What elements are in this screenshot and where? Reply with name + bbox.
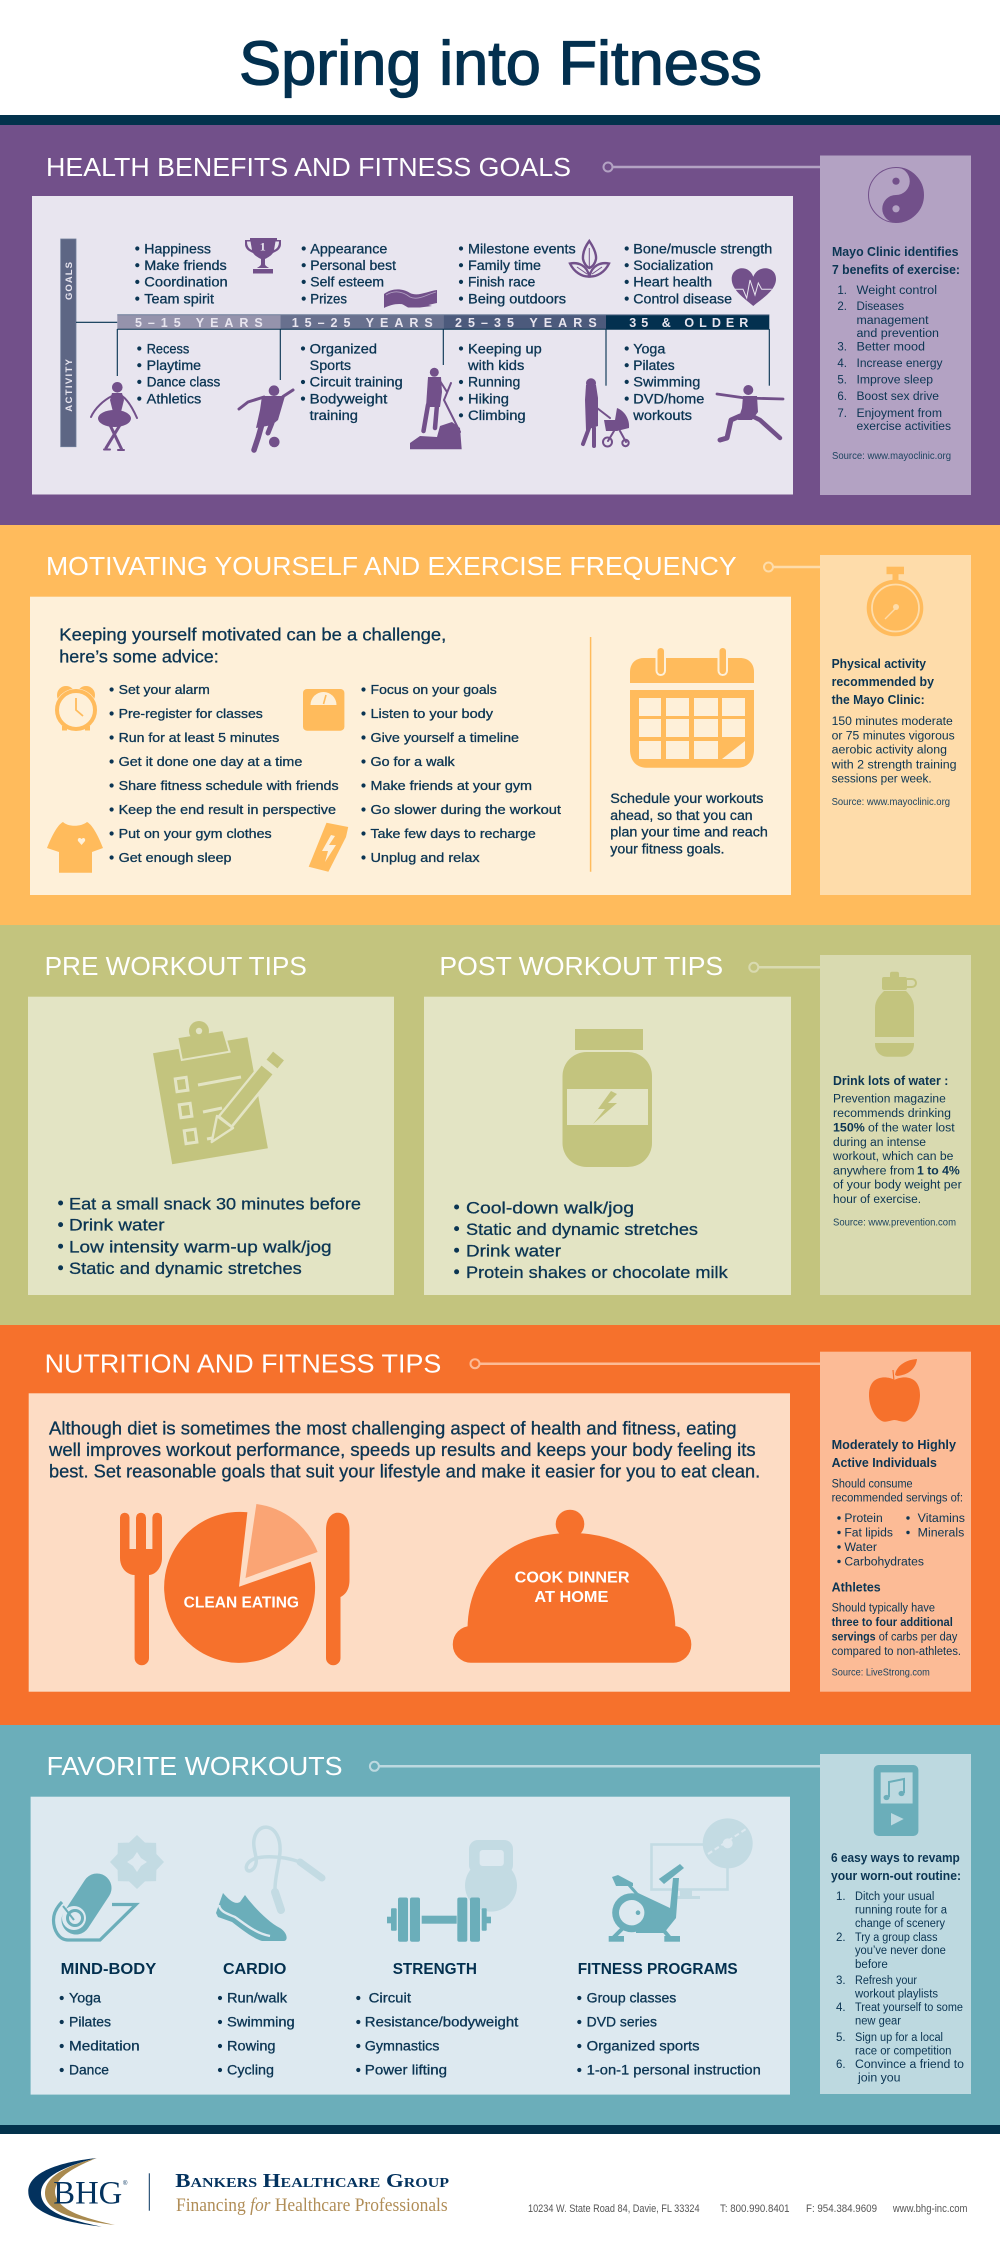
sidebar: nutrition for active individuals	[820, 1352, 971, 1692]
connector: favorite workouts	[370, 1762, 820, 1771]
column: strength: Resistance/bodyweight	[365, 2014, 519, 2030]
icon: water bottle	[875, 972, 916, 1057]
icon: trophy	[245, 238, 281, 274]
timeline age bands: 35 & OLDER	[629, 316, 748, 330]
benefits list: exercise activities	[856, 421, 951, 433]
schedule note: ahead, so that you can	[610, 808, 753, 823]
nutrition paragraph: best. Set reasonable goals that suit your lifestyle and make it easier for you to eat clean.	[49, 1461, 760, 1482]
advice list: right column: Go slower during the workout	[370, 802, 561, 817]
activity list: 5-15 years: Playtime	[147, 358, 201, 373]
goals list: 35 and older: Heart health	[633, 275, 712, 290]
column: fitness programs: DVD series	[587, 2014, 657, 2030]
icon: running shoe	[216, 1893, 287, 1941]
benefits list: 4.	[837, 358, 847, 370]
routine list: 5.	[836, 2032, 846, 2044]
benefits list: Weight control	[856, 285, 937, 297]
heading: post workout tips: POST WORKOUT TIPS	[439, 951, 723, 981]
schedule note: your fitness goals.	[610, 842, 724, 857]
clean eating plate chart	[164, 1504, 318, 1663]
activity list: 35 and older: DVD/home	[633, 391, 704, 406]
sidebar heading	[832, 1437, 957, 1470]
icon: trophy: 1	[260, 240, 266, 254]
activity list: 15-25 years	[301, 341, 403, 423]
contact details: 10234 W. State Road 84, Davie, FL 33324	[528, 2203, 700, 2215]
logo: BHG: BHG	[53, 2175, 122, 2211]
athletes text: three to four additional	[832, 1617, 953, 1629]
source: Source: LiveStrong.com	[832, 1668, 930, 1679]
side bar: goals and activity: GOALS	[64, 262, 75, 300]
column: mind-body: Pilates	[69, 2014, 111, 2030]
advice list: right column: Take few days to recharge	[370, 826, 536, 841]
advice list: left column: Set your alarm	[119, 682, 210, 697]
icon: stopwatch	[867, 567, 923, 636]
intro text: Keeping yourself motivated can be a challenge,	[59, 625, 446, 645]
goals list: 15-25 years: Prizes	[310, 291, 347, 306]
heading: motivating yourself: MOTIVATING YOURSELF AND EXERCISE FREQUENCY	[46, 551, 737, 581]
pre workout list	[61, 1194, 361, 1278]
sidebar body	[831, 716, 957, 785]
cloche: cook dinner at home	[453, 1510, 691, 1663]
advice list: right column: Go for a walk	[370, 754, 455, 769]
activity list: 35 and older: Swimming	[633, 375, 700, 390]
advice list: left column: Run for at least 5 minutes	[119, 730, 280, 745]
column: fitness programs	[578, 1961, 761, 2078]
sidebar body: anywhere from	[833, 1165, 914, 1177]
panel: post workout	[424, 997, 791, 1295]
sidebar: drink water	[820, 955, 971, 1295]
icon: lotus flower	[110, 1835, 164, 1889]
sidebar heading: 7 benefits of exercise:	[832, 262, 960, 277]
athletes text: Should typically have	[832, 1603, 935, 1615]
icon: exercise bike	[609, 1864, 684, 1942]
timeline age bands: 15–25 YEARS	[292, 316, 433, 330]
post workout list: Drink water	[466, 1242, 561, 1261]
servings text: recommended servings of:	[832, 1493, 963, 1505]
goals list: 25-35 years: Family time	[468, 258, 541, 273]
routine list: 6.	[836, 2059, 846, 2071]
activity list: 25-35 years: Running	[468, 375, 520, 390]
nutrition paragraph: Although diet is sometimes the most challenging aspect of health and fitness, eating	[49, 1417, 737, 1438]
benefits list: 7.	[837, 408, 847, 420]
routine list: Ditch your usual	[855, 1891, 934, 1903]
benefits list: 1.	[837, 285, 847, 297]
sidebar body: recommends drinking	[833, 1108, 951, 1120]
sidebar heading: Moderately to Highly	[832, 1437, 957, 1452]
advice list: left column: Get it done one day at a time	[119, 754, 302, 769]
routine list: 1.	[836, 1891, 846, 1903]
column: cardio: CARDIO	[223, 1961, 286, 1978]
sidebar body: of the water lost	[868, 1122, 956, 1134]
icon: energy bar	[309, 823, 348, 872]
sidebar heading: your worn-out routine:	[831, 1868, 961, 1883]
source: Source: www.mayoclinic.org	[832, 451, 951, 462]
icon: heart with pulse	[732, 268, 776, 306]
servings list: Protein	[844, 1513, 883, 1525]
schedule note: Schedule your workouts	[610, 791, 764, 806]
logo: BHG	[28, 2158, 128, 2227]
connector: nutrition	[470, 1359, 820, 1368]
routine list: change of scenery	[855, 1918, 945, 1930]
routine list: Refresh your	[855, 1975, 917, 1987]
icon: plant	[570, 241, 609, 277]
activity list: 25-35 years: Hiking	[468, 391, 509, 406]
section: health benefits and fitness goals	[0, 125, 1000, 525]
column: cardio: Run/walk	[227, 1990, 287, 2006]
servings text: Should consume	[832, 1478, 913, 1490]
sidebar heading: Physical activity	[832, 656, 927, 671]
section: nutrition and fitness tips	[0, 1325, 1000, 1725]
sidebar body: 1 to 4%	[917, 1165, 960, 1177]
sidebar heading: Drink lots of water :	[833, 1073, 948, 1088]
intro text: here’s some advice:	[59, 646, 219, 666]
figure: woman with stroller	[583, 378, 629, 446]
servings text	[832, 1478, 963, 1505]
sidebar body: aerobic activity along	[832, 745, 947, 757]
sidebar body: 150%	[833, 1122, 865, 1134]
contact details: www.bhg-inc.com	[892, 2203, 968, 2215]
section: motivating yourself and exercise frequency	[0, 525, 1000, 925]
sidebar body: hour of exercise.	[833, 1194, 921, 1206]
sidebar heading	[832, 244, 960, 277]
activity list: 15-25 years: Sports	[310, 358, 351, 373]
side bar: goals and activity: ACTIVITY	[64, 358, 75, 412]
activity list: 25-35 years	[459, 341, 542, 423]
benefits list: management	[856, 315, 929, 327]
column: strength: Circuit	[369, 1990, 411, 2006]
routine list: 4.	[836, 2002, 846, 2014]
servings list: Water	[844, 1542, 877, 1554]
benefits list: Better mood	[856, 342, 925, 354]
benefits list: and prevention	[856, 328, 939, 340]
sidebar heading: the Mayo Clinic:	[832, 692, 925, 707]
source: Source: www.mayoclinic.org	[832, 797, 950, 808]
column: cardio: Rowing	[227, 2038, 276, 2054]
goals list: 25-35 years: Milestone events	[468, 241, 576, 256]
cloche: cook dinner at home: AT HOME	[534, 1589, 608, 1606]
activity list: 5-15 years: Athletics	[147, 391, 202, 406]
sidebar body: 150 minutes moderate	[832, 716, 953, 728]
goals list: 15-25 years: Appearance	[310, 241, 387, 256]
advice list: right column: Unplug and relax	[370, 850, 480, 865]
benefits list: Diseases	[856, 301, 904, 313]
section: workout tips	[0, 925, 1000, 1325]
benefits list: 6.	[837, 391, 847, 403]
advice list: right column	[364, 682, 561, 865]
timeline age bands: 25–35 YEARS	[455, 316, 597, 330]
sidebar body: during an intense	[833, 1137, 926, 1149]
activity list: 5-15 years: Recess	[147, 341, 190, 356]
tagline: Financing for Healthcare Professionals	[176, 2195, 448, 2216]
benefits list: Enjoyment from	[856, 408, 942, 420]
goals list: 15-25 years	[304, 241, 396, 306]
routine list: Convince a friend to	[855, 2059, 964, 2071]
servings list	[839, 1513, 965, 1568]
column: fitness programs: Group classes	[587, 1990, 677, 2006]
company name: Bankers Healthcare Group	[175, 2170, 450, 2192]
routine list: workout playlists	[854, 1988, 938, 2000]
goals list: 5-15 years	[137, 241, 228, 306]
contact details: F: 954.384.9609	[806, 2203, 877, 2215]
servings list: Minerals	[918, 1527, 965, 1539]
athletes text: of carbs per day	[879, 1632, 958, 1644]
routine list: before	[855, 1959, 888, 1971]
post workout list: Protein shakes or chocolate milk	[466, 1263, 728, 1282]
timeline age bands: 5–15 YEARS	[135, 316, 263, 330]
benefits list: Increase energy	[856, 358, 943, 370]
benefits list: 3.	[837, 342, 847, 354]
icon: knife	[326, 1513, 350, 1665]
goals list: 35 and older: Control disease	[633, 291, 732, 306]
sidebar heading	[832, 656, 935, 707]
routine list: join you	[857, 2073, 900, 2085]
column: fitness programs: 1-on-1 personal instruction	[587, 2062, 761, 2078]
pre workout list: Eat a small snack 30 minutes before	[69, 1194, 361, 1213]
activity list: 5-15 years	[139, 341, 221, 406]
goals list: 25-35 years: Finish race	[468, 275, 535, 290]
timeline age bands	[117, 315, 769, 330]
column: mind-body: MIND-BODY	[61, 1961, 157, 1978]
sidebar body: or 75 minutes vigorous	[832, 730, 955, 742]
icon: bathroom scale	[303, 689, 344, 731]
pre workout list: Drink water	[69, 1216, 165, 1235]
icon: clipboard and pencil	[153, 1021, 278, 1164]
source: Source: www.prevention.com	[833, 1218, 956, 1229]
icon: jump rope	[246, 1827, 322, 1910]
advice list: right column: Focus on your goals	[370, 682, 497, 697]
sidebar heading: Active Individuals	[832, 1455, 937, 1470]
icon: kettlebell	[465, 1840, 517, 1912]
goals list: 5-15 years: Happiness	[144, 241, 211, 256]
panel: goals and activity timeline	[32, 196, 793, 494]
sidebar: mayo clinic benefits	[820, 156, 971, 495]
nutrition paragraph: well improves workout performance, speeds up results and keeps your body feeling its	[48, 1439, 756, 1460]
icon: monitor and dvd	[652, 1818, 753, 1899]
heading: nutrition: NUTRITION AND FITNESS TIPS	[45, 1348, 441, 1378]
sidebar: physical activity	[820, 555, 971, 895]
routine list: Try a group class	[855, 1932, 938, 1944]
column: mind-body	[61, 1961, 157, 2078]
routine list: running route for a	[855, 1905, 948, 1917]
servings list: Vitamins	[918, 1513, 965, 1525]
goals list: 5-15 years: Make friends	[144, 258, 227, 273]
connector: post workout	[749, 963, 820, 972]
sidebar: revamp your routine	[820, 1754, 971, 2094]
figure: person on elliptical	[410, 368, 462, 449]
icon: music player	[874, 1765, 918, 1836]
advice list: right column: Make friends at your gym	[370, 778, 532, 793]
nutrition paragraph	[48, 1417, 760, 1482]
routine list: new gear	[855, 2016, 901, 2028]
sidebar body: with 2 strength training	[831, 759, 957, 771]
goals list: 5-15 years: Coordination	[144, 275, 228, 290]
activity list: 15-25 years: Bodyweight	[310, 391, 388, 406]
sidebar body: of your body weight per	[833, 1180, 962, 1192]
activity list: 35 and older: Pilates	[633, 358, 675, 373]
figure: yoga warrior pose	[717, 385, 783, 440]
column: mind-body: Dance	[69, 2062, 109, 2078]
pre workout list: Static and dynamic stretches	[69, 1259, 302, 1278]
column: strength: Power lifting	[365, 2062, 447, 2078]
title: Spring into Fitness	[239, 30, 762, 98]
advice list: right column: Give yourself a timeline	[370, 730, 519, 745]
footer	[28, 2158, 967, 2227]
panel: workouts	[31, 1797, 790, 2095]
activity list: 5-15 years: Dance class	[147, 375, 221, 390]
sidebar body: sessions per week.	[832, 773, 932, 785]
column: cardio: Swimming	[227, 2014, 295, 2030]
heading: health benefits: HEALTH BENEFITS AND FITNESS GOALS	[46, 152, 571, 182]
contact details: T: 800.990.8401	[720, 2203, 790, 2215]
activity list: 15-25 years: Organized	[310, 341, 377, 356]
panel: pre workout	[28, 997, 394, 1295]
side bar: goals and activity	[61, 239, 76, 447]
goals list: 5-15 years: Team spirit	[144, 291, 214, 306]
icon: t-shirt	[47, 822, 103, 873]
routine list: Sign up for a local	[855, 2032, 943, 2044]
benefits list: Improve sleep	[856, 375, 933, 387]
contact details	[528, 2203, 968, 2215]
sidebar heading: Mayo Clinic identifies	[832, 244, 958, 259]
routine list: you’ve never done	[855, 1945, 946, 1957]
activity list: 15-25 years: Circuit training	[310, 375, 403, 390]
icon: apple	[869, 1359, 920, 1422]
schedule note: plan your time and reach	[610, 825, 768, 840]
athletes heading: Athletes	[832, 1580, 881, 1595]
post workout list	[457, 1198, 728, 1282]
sidebar body	[832, 1094, 962, 1206]
icon: yin-yang	[868, 168, 924, 222]
advice list: left column: Share fitness schedule with friends	[119, 778, 339, 793]
post workout list: Cool-down walk/jog	[466, 1198, 634, 1217]
icon: measuring tape	[384, 289, 437, 308]
cloche: cook dinner at home: COOK DINNER	[515, 1570, 630, 1587]
goals list: 25-35 years: Being outdoors	[468, 291, 566, 306]
advice list: left column: Pre-register for classes	[119, 706, 263, 721]
figure: ballerina	[91, 382, 137, 450]
heading: pre workout tips: PRE WORKOUT TIPS	[45, 951, 307, 981]
sidebar heading: 6 easy ways to revamp	[831, 1850, 960, 1865]
heading: favorite workouts: FAVORITE WORKOUTS	[47, 1751, 342, 1781]
icon: alarm clock	[54, 686, 98, 732]
routine list: 2.	[836, 1932, 846, 1944]
advice list: left column: Keep the end result in perspective	[119, 802, 336, 817]
routine list: Treat yourself to some	[855, 2002, 963, 2014]
sidebar body: Prevention magazine	[833, 1094, 946, 1106]
activity list: 25-35 years: Keeping up	[468, 341, 542, 356]
activity list: 25-35 years: Climbing	[468, 408, 526, 423]
column: cardio	[220, 1961, 295, 2078]
column: fitness programs: FITNESS PROGRAMS	[578, 1961, 738, 1978]
goals list: 25-35 years	[461, 241, 576, 306]
servings list: Carbohydrates	[844, 1556, 924, 1568]
column: mind-body: Yoga	[69, 1990, 102, 2006]
benefits list: Boost sex drive	[856, 391, 939, 403]
column: cardio: Cycling	[227, 2062, 274, 2078]
icon: supplement jar	[562, 1029, 652, 1167]
routine list: 3.	[836, 1975, 846, 1987]
column: mind-body: Meditation	[69, 2038, 140, 2054]
activity list: 25-35 years: with kids	[467, 358, 525, 373]
goals list: 35 and older	[627, 241, 772, 306]
post workout list: Static and dynamic stretches	[466, 1220, 698, 1239]
advice list: left column: Put on your gym clothes	[119, 826, 272, 841]
pre workout list: Low intensity warm-up walk/jog	[69, 1237, 332, 1256]
logo: BHG: ®	[123, 2180, 128, 2187]
goals list: 15-25 years: Personal best	[310, 258, 396, 273]
activity list: 15-25 years: training	[310, 408, 358, 423]
athletes text: servings	[832, 1632, 876, 1644]
benefits list	[837, 285, 951, 433]
advice list: right column: Listen to your body	[370, 706, 494, 721]
icon: fork	[120, 1513, 162, 1665]
column: strength: Gymnastics	[365, 2038, 440, 2054]
sidebar heading: recommended by	[832, 674, 935, 689]
column: fitness programs: Organized sports	[587, 2038, 700, 2054]
activity list: 35 and older: workouts	[632, 408, 692, 423]
athletes text	[832, 1603, 961, 1658]
goals list: 15-25 years: Self esteem	[310, 275, 384, 290]
icon: calendar	[630, 647, 754, 768]
intro text	[59, 625, 446, 666]
sidebar heading	[831, 1850, 961, 1883]
connector: health benefits	[604, 162, 820, 172]
schedule note	[610, 791, 768, 857]
icon: yoga mat	[54, 1888, 136, 1940]
activity list: 35 and older	[627, 341, 704, 423]
panel: nutrition	[29, 1393, 790, 1692]
routine list: race or competition	[855, 2046, 952, 2058]
advice list: left column	[112, 682, 339, 865]
benefits list: 5.	[837, 375, 847, 387]
sidebar body: workout, which can be	[832, 1151, 953, 1163]
servings list: Fat lipids	[844, 1527, 893, 1539]
figure: soccer player	[239, 385, 293, 450]
connector: motivating	[764, 562, 820, 572]
benefits list: 2.	[837, 301, 847, 313]
clean eating plate chart: CLEAN EATING	[184, 1595, 299, 1612]
section: favorite workouts	[0, 1725, 1000, 2125]
panel: motivation advice	[30, 597, 791, 895]
routine list	[836, 1891, 964, 2085]
goals list: 35 and older: Bone/muscle strength	[633, 241, 772, 256]
column: strength: STRENGTH	[393, 1961, 477, 1978]
athletes text: compared to non-athletes.	[832, 1646, 961, 1658]
column: strength	[358, 1961, 519, 2078]
icon: dumbbell	[387, 1898, 491, 1942]
advice list: left column: Get enough sleep	[119, 850, 232, 865]
goals list: 35 and older: Socialization	[633, 258, 713, 273]
activity list: 35 and older: Yoga	[633, 341, 666, 356]
